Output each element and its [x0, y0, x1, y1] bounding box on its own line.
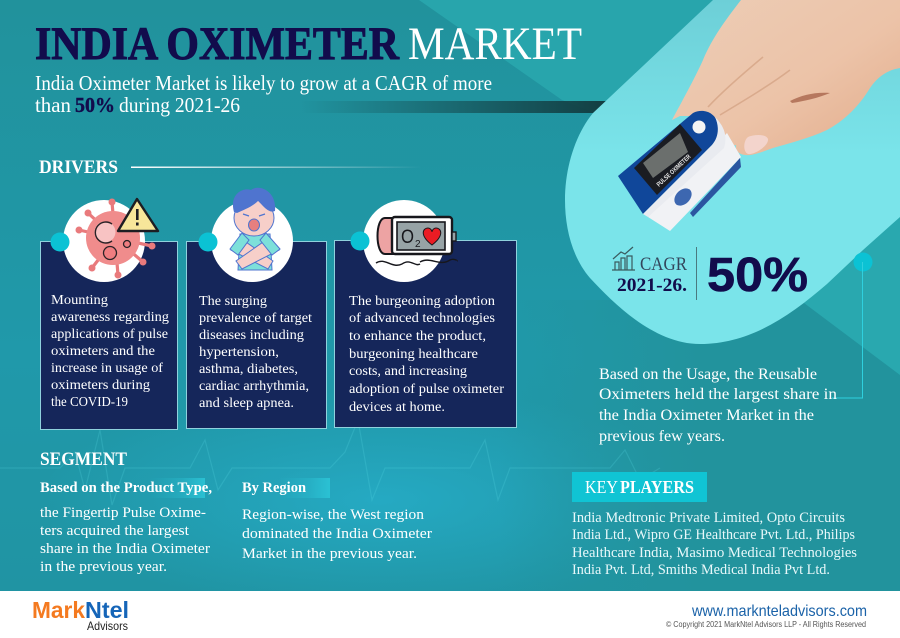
- text block: the COVID-19: [51, 395, 128, 410]
- text block: by region: Region-wise, the West region: [242, 507, 425, 523]
- stat: CAGR: 50%: [707, 249, 808, 302]
- title: MARKET: [408, 18, 582, 70]
- panel: driver card 1: [40, 198, 178, 430]
- text block: cardiac arrhythmia,: [199, 379, 309, 394]
- text block: product type: share in the India Oximeter: [40, 541, 210, 557]
- text block: and sleep apnea.: [199, 396, 294, 411]
- text block: usage: previous few years.: [599, 428, 725, 445]
- text block: key players: Healthcare India, Masimo Medical Technologies: [572, 545, 857, 561]
- text block: increase in usage of: [51, 361, 163, 376]
- heading: drivers: DRIVERS: [39, 157, 118, 178]
- text block: usage: [599, 366, 837, 445]
- panel: driver card 2: [186, 188, 326, 428]
- text block: product type: Based on the Product Type,: [40, 480, 212, 496]
- text block: [349, 294, 504, 415]
- text block: costs, and increasing: [349, 364, 467, 379]
- text block: key players: India Ltd., Wipro GE Healthcare Pvt. Ltd., Philips: [572, 527, 855, 543]
- website and copyright: www.marknteladvisors.com: [691, 603, 867, 620]
- dot: [198, 232, 218, 252]
- text block: burgeoning healthcare: [349, 347, 478, 362]
- text block: applications of pulse: [51, 327, 168, 342]
- text block: diseases including: [199, 328, 304, 343]
- icon: growth chart: [612, 247, 635, 270]
- text block: by region: By Region: [242, 480, 306, 496]
- text block: devices at home.: [349, 400, 445, 415]
- stat: CAGR: CAGR: [640, 254, 687, 275]
- text block: key players: India Pvt. Ltd, Smiths Medical India Pvt Ltd.: [572, 562, 830, 578]
- text block: adoption of pulse oximeter: [349, 382, 504, 397]
- logo: MarkNtel Advisors: Advisors: [87, 619, 128, 633]
- text block: oximeters and the: [51, 344, 155, 359]
- text block: product type: the Fingertip Pulse Oxime-: [40, 505, 206, 521]
- text block: awareness regarding: [51, 310, 169, 325]
- text block: Mounting: [51, 293, 108, 308]
- illustration: pulse oximeter: [618, 111, 741, 231]
- connector: dot and line: [832, 252, 872, 398]
- text block: [51, 293, 169, 410]
- text block: The surging: [199, 294, 267, 309]
- panel: oximeter pill: [565, 0, 900, 344]
- text block: hypertension,: [199, 345, 279, 360]
- text block: of advanced technologies: [349, 311, 495, 326]
- text block: prevalence of target: [199, 311, 312, 326]
- text block: oximeters during: [51, 378, 150, 393]
- icon: virus with warning: [76, 198, 158, 278]
- subtitle: 50%: [75, 93, 115, 117]
- icon: battery with oxygen: [376, 217, 457, 265]
- text block: [199, 294, 312, 411]
- text block: asthma, diabetes,: [199, 362, 298, 377]
- stat: CAGR: [612, 247, 808, 302]
- text block: product type: [40, 478, 212, 575]
- logo: MarkNtel Advisors: Mark: [32, 597, 85, 623]
- icon: person coughing: [230, 188, 280, 270]
- text block: by region: dominated the India Oximeter: [242, 526, 432, 542]
- subtitle: India Oximeter Market is likely to grow at a CAGR of more: [35, 71, 492, 95]
- website and copyright: © Copyright 2021 MarkNtel Advisors LLP - All Rights Reserved: [666, 620, 866, 629]
- text block: usage: Oximeters held the largest share in: [599, 386, 837, 403]
- icon: battery with oxygen: O: [401, 227, 414, 248]
- heading: segment: SEGMENT: [40, 449, 127, 470]
- text block: product type: ters acquired the largest: [40, 523, 190, 539]
- text block: usage: Based on the Usage, the Reusable: [599, 366, 817, 383]
- stat: CAGR: 2021-26.: [617, 275, 687, 296]
- text block: usage: the India Oximeter Market in the: [599, 407, 814, 424]
- text block: product type: in the previous year.: [40, 559, 167, 575]
- heading: key players: [572, 472, 707, 502]
- logo: MarkNtel Advisors: [32, 597, 129, 633]
- text block: by region: Market in the previous year.: [242, 546, 417, 562]
- dark gradient bar: [300, 101, 610, 113]
- title: INDIA OXIMETER: [35, 18, 400, 70]
- text block: to enhance the product,: [349, 329, 486, 344]
- illustration: pulse oximeter: PULSE OXIMETER: [656, 153, 693, 188]
- illustration: hand: [672, 0, 900, 155]
- panel: driver card 3: [334, 200, 516, 428]
- subtitle: than: [35, 93, 71, 117]
- subtitle: during 2021-26: [119, 93, 240, 117]
- footer: [0, 591, 900, 638]
- text block: key players: India Medtronic Private Limited, Opto Circuits: [572, 510, 845, 526]
- logo: MarkNtel Advisors: Ntel: [85, 597, 129, 623]
- text block: The burgeoning adoption: [349, 294, 495, 309]
- dot: [50, 232, 70, 252]
- dot: [350, 232, 370, 250]
- icon: battery with oxygen: 2: [415, 239, 421, 250]
- text block: key players: [572, 510, 857, 578]
- text block: by region: [242, 478, 432, 562]
- subtitle: [35, 71, 492, 117]
- heading: key players: PLAYERS: [620, 477, 694, 497]
- heading: key players: KEY: [585, 477, 618, 497]
- website and copyright: [666, 603, 867, 629]
